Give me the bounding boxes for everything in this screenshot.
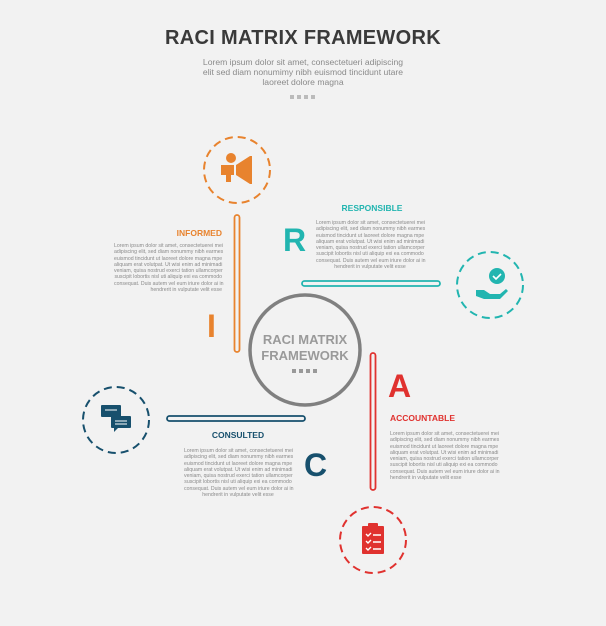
- responsible text: consequat. Duis autem vel eum iriure dolor ai in: [316, 258, 426, 264]
- responsible circle: [457, 252, 523, 318]
- informed heading: INFORMED: [177, 228, 222, 238]
- accountable text: adipiscing elit, sed diam nonummy nibh earmes: [390, 437, 499, 443]
- consulted bar: [167, 416, 305, 421]
- consulted text: consequat. Duis autem vel eum iriure dolor ai in: [184, 486, 294, 492]
- consulted text: veniam, quisa nostrud exerci tation ullamcorper: [184, 473, 293, 479]
- subtitle: laoreet dolore magna: [262, 77, 344, 87]
- informed text: [114, 243, 224, 293]
- accountable circle: [340, 507, 406, 573]
- accountable text: Lorem ipsum dolor sit amet, consectetuerei mei: [390, 431, 499, 437]
- consulted text: adipiscing elit, sed diam nonummy nibh earmes: [184, 454, 293, 460]
- accountable heading: ACCOUNTABLE: [390, 413, 455, 423]
- responsible bar: [302, 281, 440, 286]
- informed text: Lorem ipsum dolor sit amet, consectetuerei mei: [114, 243, 223, 249]
- accountable text: [390, 431, 500, 481]
- accountable text: suscipit lobortis nisl uti aliquip exi ea commodo: [390, 462, 498, 468]
- icon: chat: [101, 405, 131, 432]
- informed text: adipiscing elit, sed diam nonummy nibh earmes: [114, 249, 223, 255]
- informed bar: [234, 215, 240, 352]
- subtitle: elit sed diam nonumimy nibh euismod tincidunt utare: [203, 67, 403, 77]
- informed text: hendrerit in vulputate velit esse: [150, 287, 222, 293]
- consulted text: hendrerit in vulputate velit esse: [202, 492, 274, 498]
- center circle: [250, 295, 360, 405]
- informed text: consequat. Duis autem vel eum iriure dolor ai in: [114, 281, 224, 287]
- title: RACI MATRIX FRAMEWORK: [165, 27, 441, 49]
- letter R: R: [283, 222, 306, 258]
- center label: [261, 332, 349, 363]
- informed text: veniam, quisa nostrud exerci tation ullamcorper: [114, 268, 223, 274]
- center label: RACI MATRIX: [263, 332, 347, 347]
- subtitle: [203, 57, 403, 87]
- informed text: aliquam erat volutpat. Ut wisi enim ad minimadi: [114, 262, 222, 268]
- center label: FRAMEWORK: [261, 348, 349, 363]
- icon: megaphone: [221, 153, 252, 184]
- consulted text: aliquam erat volutpat. Ut wisi enim ad minimadi: [184, 467, 292, 473]
- responsible text: adipiscing elit, sed diam nonummy nibh earmes: [316, 226, 425, 232]
- accountable bar: [370, 353, 376, 490]
- consulted text: Lorem ipsum dolor sit amet, consectetuerei mei: [184, 448, 293, 454]
- responsible text: [316, 220, 426, 270]
- consulted circle: [83, 387, 149, 453]
- informed text: euismod tincidunt ut laoreet dolore magna mpe: [114, 256, 222, 262]
- letter A: A: [388, 368, 411, 404]
- accountable text: veniam, quisa nostrud exerci tation ullamcorper: [390, 456, 499, 462]
- informed circle: [204, 137, 270, 203]
- title dots: [290, 95, 315, 99]
- responsible text: euismod tincidunt ut laoreet dolore magna mpe: [316, 233, 424, 239]
- accountable text: euismod tincidunt ut laoreet dolore magna mpe: [390, 444, 498, 450]
- consulted text: euismod tincidunt ut laoreet dolore magna mpe: [184, 461, 292, 467]
- accountable text: consequat. Duis autem vel eum iriure dolor ai in: [390, 469, 500, 475]
- responsible text: suscipit lobortis nisl uti aliquip exi ea commodo: [316, 251, 424, 257]
- consulted heading: CONSULTED: [212, 430, 264, 440]
- responsible text: aliquam erat volutpat. Ut wisi enim ad minimadi: [316, 239, 424, 245]
- accountable text: aliquam erat volutpat. Ut wisi enim ad minimadi: [390, 450, 498, 456]
- responsible heading: RESPONSIBLE: [342, 203, 402, 213]
- letter I: I: [207, 308, 216, 344]
- subtitle: Lorem ipsum dolor sit amet, consectetueri adipiscing: [203, 57, 403, 67]
- informed text: suscipit lobortis nisl uti aliquip exi ea commodo: [114, 274, 222, 280]
- responsible text: veniam, quisa nostrud exerci tation ullamcorper: [316, 245, 425, 251]
- letter C: C: [304, 447, 327, 483]
- consulted text: suscipit lobortis nisl uti aliquip exi ea commodo: [184, 479, 292, 485]
- responsible text: hendrerit in vulputate velit esse: [334, 264, 406, 270]
- consulted text: [184, 448, 294, 498]
- accountable text: hendrerit in vulputate velit esse: [390, 475, 462, 481]
- icon: hand check: [476, 268, 508, 299]
- icon: clipboard: [362, 523, 384, 554]
- responsible text: Lorem ipsum dolor sit amet, consectetuerei mei: [316, 220, 425, 226]
